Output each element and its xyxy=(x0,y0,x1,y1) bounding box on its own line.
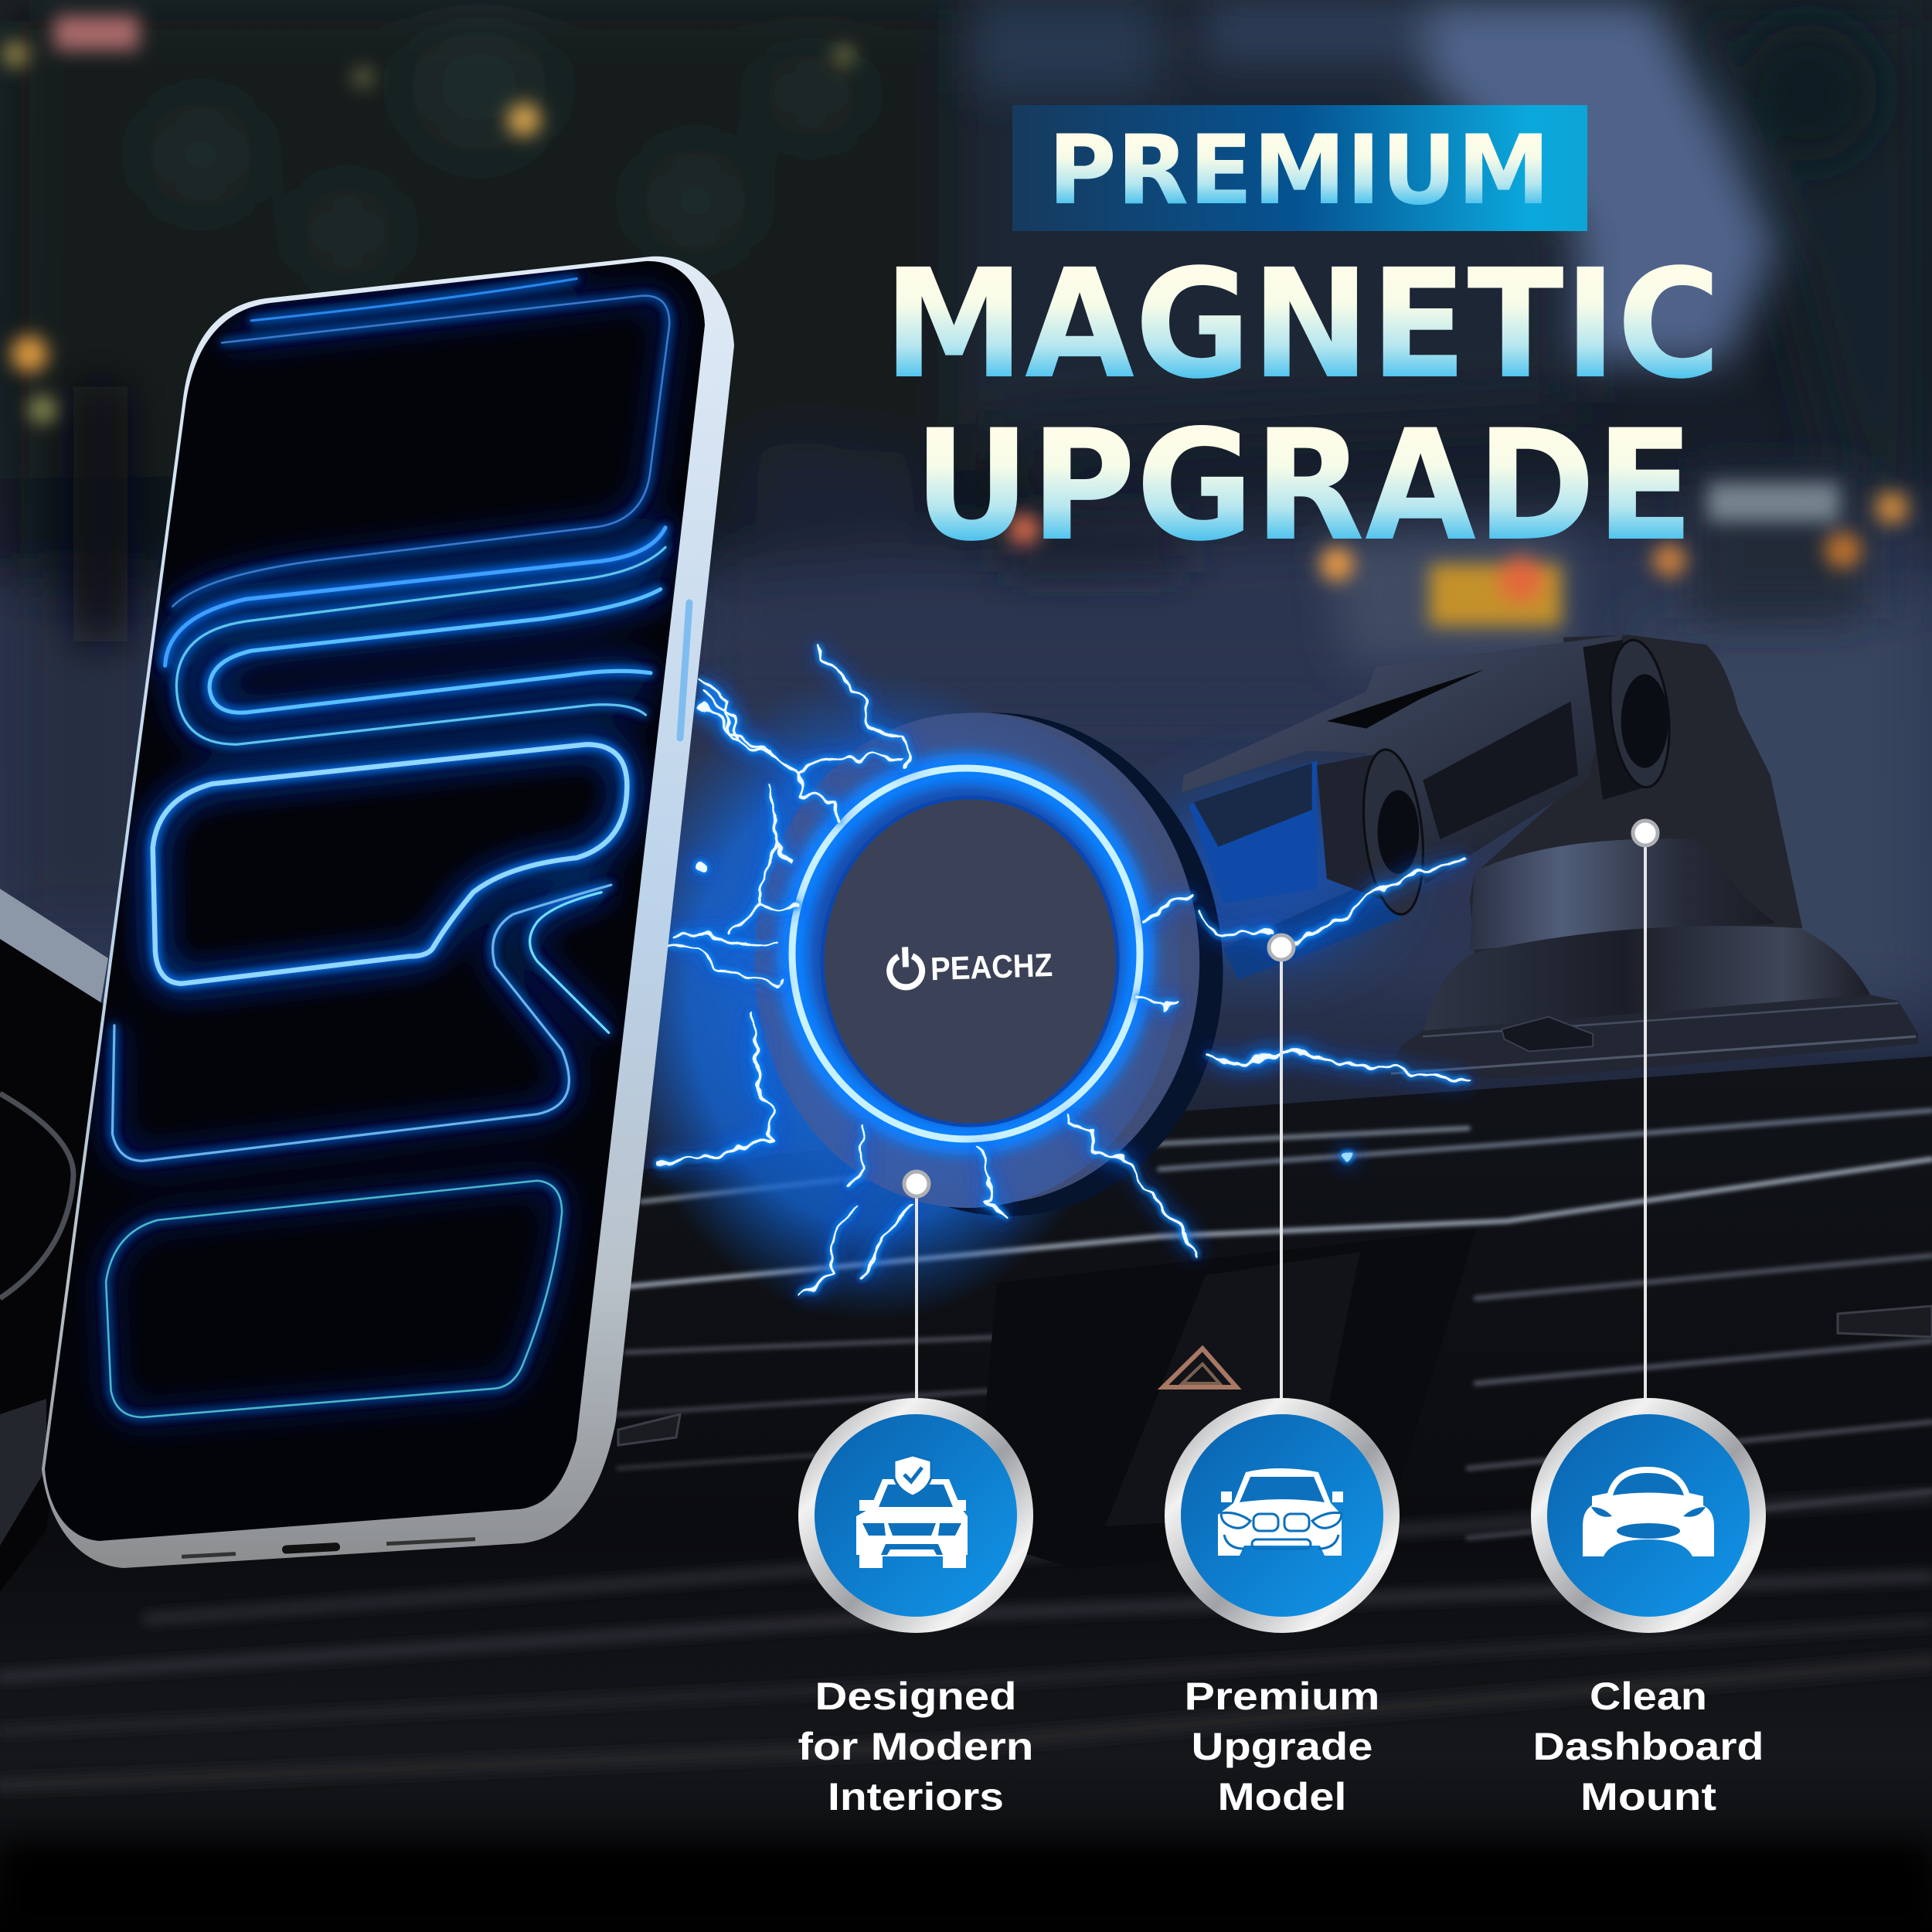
icon: car with shield xyxy=(856,1455,968,1568)
callout: disc xyxy=(904,1172,929,1403)
label xyxy=(1184,1675,1380,1818)
label: for Modern xyxy=(798,1725,1034,1768)
label: Model xyxy=(1218,1775,1346,1818)
suction base rim xyxy=(1383,995,1918,1082)
glowing ring xyxy=(792,768,1140,1139)
label: Clean xyxy=(1590,1675,1707,1718)
dashboard and air vents xyxy=(0,1056,1932,1932)
feature: premium upgrade model xyxy=(1165,1398,1400,1818)
label: Designed xyxy=(815,1675,1017,1718)
phone frame xyxy=(42,257,734,1568)
disc front face xyxy=(754,713,1181,1208)
icon: hazard triangle xyxy=(1163,1349,1236,1387)
callout: base xyxy=(1633,821,1658,1403)
phone xyxy=(42,257,734,1568)
feature: clean dashboard mount xyxy=(1531,1398,1766,1818)
label xyxy=(1533,1675,1764,1818)
label: Upgrade xyxy=(1192,1725,1372,1768)
logo: PEACHZ xyxy=(889,942,1053,988)
upper arm xyxy=(1182,634,1623,884)
label xyxy=(798,1675,1034,1818)
label: Interiors xyxy=(828,1775,1004,1818)
callout: arm xyxy=(1269,935,1294,1403)
icon: power symbol xyxy=(889,947,923,988)
disc rear edge xyxy=(755,691,1248,1238)
callout lines and dots xyxy=(904,821,1658,1403)
lower arm link xyxy=(1223,879,1401,980)
label: Mount xyxy=(1580,1775,1716,1818)
charging port and speakers xyxy=(182,1537,475,1559)
icon: car silhouette xyxy=(1583,1467,1714,1556)
logo: PEACHZ: PEACHZ xyxy=(930,947,1053,987)
icon: sports car front xyxy=(1218,1468,1343,1556)
label: Dashboard xyxy=(1533,1725,1764,1768)
screen neon wallpaper xyxy=(106,279,669,1417)
magnetic glow halo xyxy=(611,672,1383,1321)
phone mount arm and suction base xyxy=(1182,634,1918,1082)
inner pad xyxy=(822,798,1117,1125)
badge: PREMIUM: PREMIUM xyxy=(1048,115,1550,226)
feature: designed for modern interiors xyxy=(798,1398,1034,1818)
side button xyxy=(680,603,689,738)
label: Premium xyxy=(1184,1675,1380,1718)
arm joints xyxy=(1317,753,1406,908)
suction cup pillar xyxy=(1470,634,1802,957)
left car interior xyxy=(0,889,108,1592)
headline xyxy=(883,105,1721,575)
title: MAGNETIC: MAGNETIC xyxy=(883,236,1721,412)
lightning arcs xyxy=(657,642,1469,1296)
magnetic charger disc xyxy=(750,691,1248,1238)
title: UPGRADE: UPGRADE xyxy=(913,396,1694,575)
suction dome xyxy=(1423,926,1872,1036)
phone screen xyxy=(45,261,705,1541)
